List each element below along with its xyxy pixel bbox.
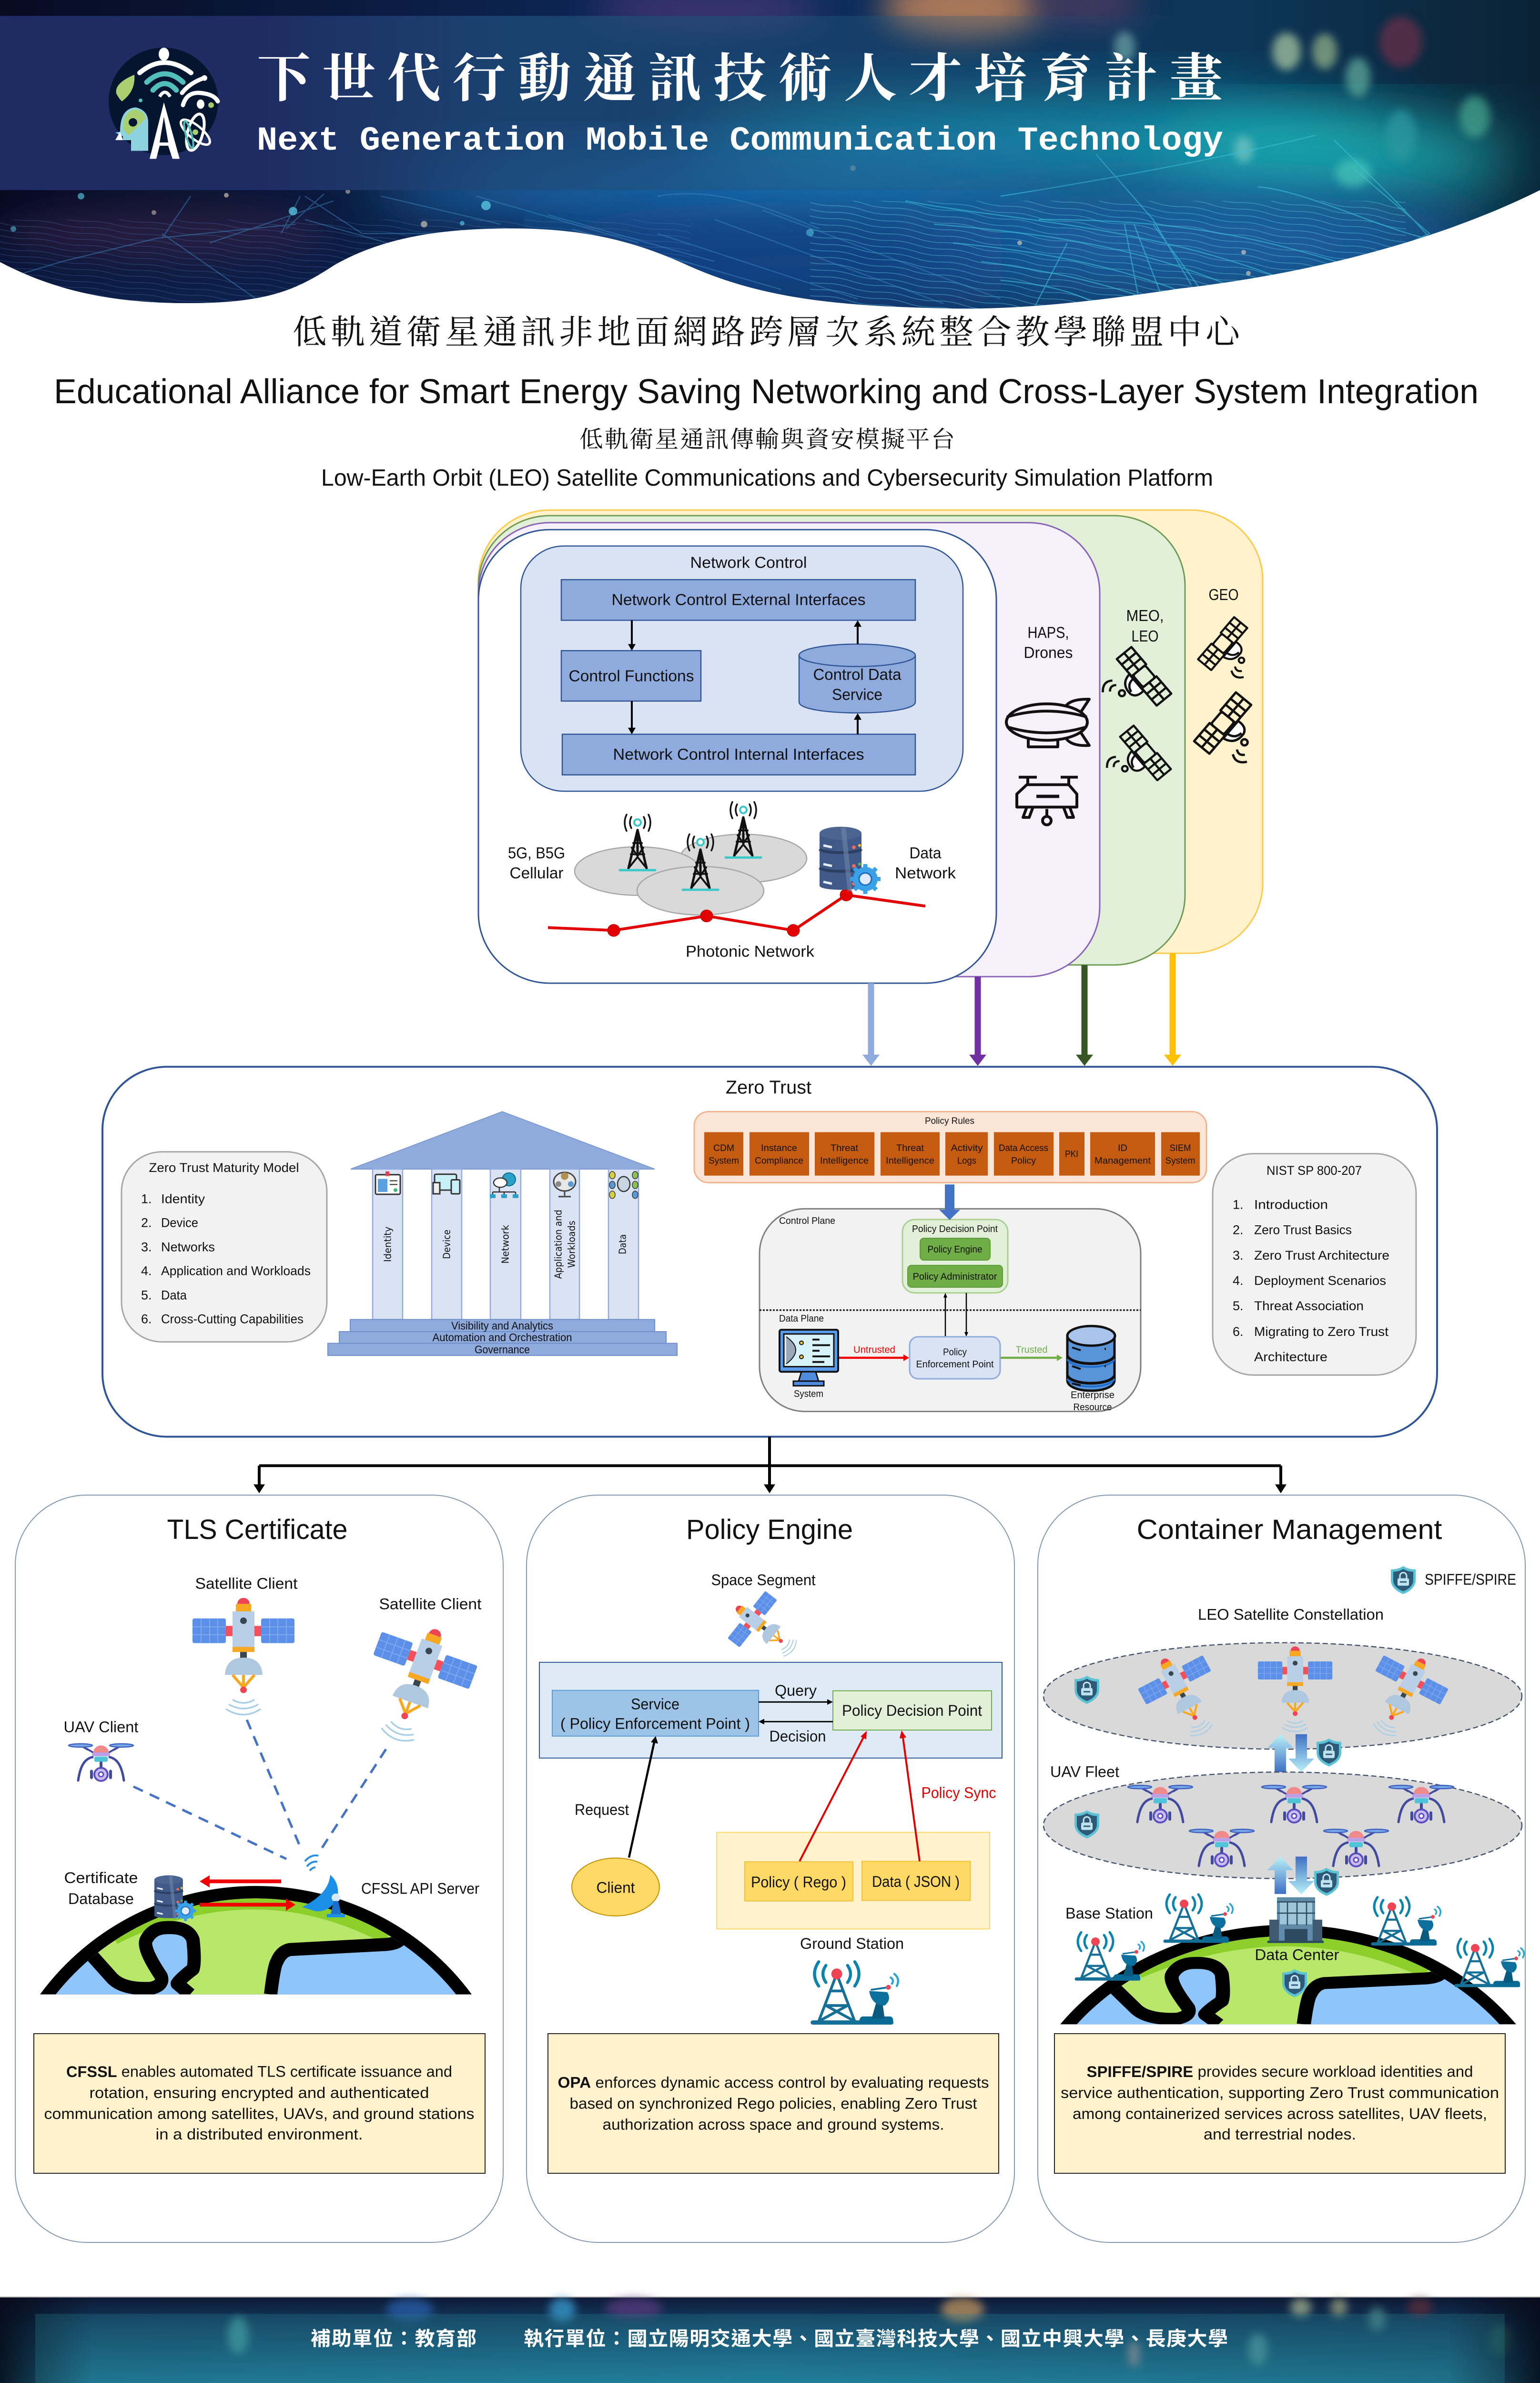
card: nist sp 800-207: Threat Association (1254, 1299, 1364, 1313)
service box: ( Policy Enforcement Point ) (560, 1715, 750, 1732)
box: data json (862, 1861, 970, 1901)
label: satellite client 1: Satellite Client (195, 1575, 297, 1592)
description box: communication among satellites, UAVs, and ground stations (44, 2105, 474, 2122)
label: cellular (508, 845, 565, 882)
space segment region (539, 1662, 1002, 1758)
label: satellite client 2: Satellite Client (379, 1595, 481, 1613)
label: data network: Data (909, 845, 942, 862)
icon: data server (820, 827, 881, 894)
subheading: platform Chinese: 低軌衛星通訊傳輸與資安模擬平台 (579, 427, 955, 452)
box: data json: Data ( JSON ) (872, 1873, 960, 1890)
network control panel (521, 546, 963, 791)
policy rules panel: Policy (1011, 1155, 1036, 1166)
column labels: Workloads (566, 1221, 578, 1268)
arrow: trusted: Trusted (1015, 1344, 1047, 1355)
column labels: Network (500, 1225, 511, 1263)
column icons (375, 1171, 638, 1199)
arrows inside network control (628, 620, 861, 734)
policy decision point: Policy Engine (927, 1244, 982, 1255)
dashed wireless links (133, 1720, 386, 1859)
cylinder: control data service: Service (832, 686, 882, 704)
control and data plane panel: Data Plane (779, 1313, 824, 1324)
card: nist sp 800-207: NIST SP 800-207 (1266, 1163, 1362, 1178)
card: nist sp 800-207: 2. (1233, 1223, 1244, 1237)
column labels: Application and (553, 1210, 564, 1279)
policy rules panel (694, 1111, 1206, 1182)
legend: spiffe spire: SPIFFE/SPIRE (1425, 1570, 1516, 1588)
label: certificate database: Database (68, 1890, 134, 1907)
box: policy rego: Policy ( Rego ) (751, 1873, 846, 1891)
foundation steps: Governance (475, 1344, 530, 1356)
card: nist sp 800-207: Introduction (1254, 1198, 1328, 1212)
policy rules panel: Instance (761, 1143, 797, 1153)
orbit ellipse: leo satellites (1044, 1642, 1522, 1750)
card: nist sp 800-207: 1. (1233, 1198, 1244, 1212)
label: data network (895, 845, 956, 882)
arrows: leo to uav (1267, 1734, 1341, 1772)
card: zero trust maturity model: Application and Workloads (161, 1264, 311, 1278)
label: base station: Base Station (1065, 1904, 1153, 1922)
policy enforcement point: Enforcement Point (916, 1359, 994, 1370)
layer panel: MEO, LEO: LEO (1131, 628, 1159, 645)
cylinder: control data service (799, 644, 915, 713)
panel: policy engine (527, 1495, 1014, 2242)
card: zero trust maturity model: Identity (161, 1192, 205, 1206)
arrows: policy sync (800, 1731, 920, 1861)
columns (373, 1169, 638, 1320)
footer band (0, 2297, 1540, 2383)
label: system: System (794, 1388, 823, 1399)
control and data plane panel (760, 1209, 1141, 1413)
title: program name Chinese: 下世代行動通訊技術人才培育計畫 (257, 50, 1223, 108)
card: zero trust maturity model: 6. (141, 1312, 152, 1326)
service box: Service (631, 1695, 679, 1712)
policy rules panel: Compliance (755, 1155, 803, 1166)
roof (351, 1111, 655, 1169)
card: nist sp 800-207: 5. (1233, 1299, 1244, 1313)
arrow: trusted (1001, 1344, 1063, 1361)
label: enterprise resource: Enterprise (1071, 1390, 1114, 1401)
box: external interfaces: Network Control External Interfaces (612, 591, 865, 609)
title: program name English: Next Generation Mobile Communication Technology (257, 122, 1223, 160)
icons: base stations (1076, 1894, 1524, 1986)
arrows: uav to data center (1267, 1857, 1339, 1896)
icon: data center building (1267, 1897, 1324, 1943)
arrow: policy rules to decision point (939, 1184, 960, 1220)
policy decision point: Policy Administrator (913, 1271, 997, 1282)
label: space segment: Space Segment (711, 1571, 816, 1589)
description box: service authentication, supporting Zero Trust communication (1061, 2084, 1499, 2101)
description box: authorization across space and ground systems. (603, 2116, 944, 2133)
policy rules panel: Intelligence (886, 1155, 934, 1166)
icon: system monitor (780, 1330, 838, 1386)
arrow: untrusted: Untrusted (853, 1344, 895, 1355)
policy enforcement point: Policy (943, 1347, 967, 1358)
column labels: Device (441, 1230, 453, 1259)
description box: SPIFFE/SPIRE provides secure workload identities and (1086, 2063, 1473, 2080)
layer panel: HAPS, Drones: Drones (1023, 644, 1073, 662)
card: zero trust maturity model: 5. (141, 1288, 152, 1302)
layer panel: GEO: GEO (1208, 586, 1239, 604)
label: ground station: Ground Station (800, 1935, 904, 1952)
connector arrows to three bottom panels (253, 1437, 1287, 1493)
layer panel: terrestrial network (478, 530, 996, 983)
icon: satellite 2 (348, 1612, 485, 1756)
card: nist sp 800-207: 3. (1233, 1248, 1244, 1263)
service box (552, 1691, 759, 1736)
description box: based on synchronized Rego policies, enabling Zero Trust (570, 2095, 977, 2112)
label: policy sync: Policy Sync (921, 1784, 996, 1802)
control and data plane panel: Control Plane (779, 1215, 835, 1226)
foundation steps: Visibility and Analytics (451, 1320, 553, 1333)
icon: blimp (1006, 699, 1089, 747)
card: nist sp 800-207: 6. (1233, 1324, 1244, 1339)
label: cellular: Cellular (510, 865, 564, 882)
box: control functions (561, 651, 701, 701)
card: zero trust maturity model: 4. (141, 1264, 152, 1278)
description box (1054, 2034, 1505, 2173)
card: nist sp 800-207: Migrating to Zero Trust (1254, 1324, 1389, 1339)
diagram: zero trust pillars (328, 1111, 677, 1356)
policy decision point box: Policy Decision Point (842, 1701, 982, 1719)
legend: spiffe spire (1391, 1566, 1516, 1594)
photonic network line (548, 889, 925, 937)
policy rules panel: Data Access (999, 1143, 1048, 1153)
card: zero trust maturity model: Networks (161, 1240, 215, 1254)
heading: zero trust: Zero Trust (726, 1077, 811, 1098)
arrow: decision: Decision (770, 1727, 826, 1745)
label: cellular: 5G, B5G (508, 845, 565, 862)
card: zero trust maturity model: Zero Trust Maturity Model (149, 1161, 299, 1175)
arrow: decision (759, 1719, 833, 1745)
footer text: executing universities: 執行單位：國立陽明交通大學、國立臺灣科技大學、國立中興大學、長庚大學 (524, 2328, 1228, 2350)
column labels: Identity (382, 1226, 394, 1262)
description box (548, 2034, 999, 2173)
icon: drone (1017, 777, 1078, 825)
box: policy rego (745, 1862, 853, 1901)
panel: zero trust (102, 1067, 1437, 1437)
icon: satellite (718, 1583, 811, 1674)
logo (109, 48, 218, 159)
orbit ellipse: uav fleet (1044, 1772, 1522, 1879)
box: internal interfaces: Network Control Internal Interfaces (613, 746, 864, 764)
ellipse: client: Client (596, 1879, 635, 1896)
policy rules panel: System (1165, 1155, 1196, 1166)
box: control functions: Control Functions (569, 668, 694, 685)
column labels (382, 1210, 628, 1279)
description box: CFSSL enables automated TLS certificate issuance and (66, 2063, 452, 2080)
layer panel: HAPS, Drones (478, 523, 1100, 977)
icon: certificate database server (154, 1875, 196, 1921)
card: zero trust maturity model: Device (161, 1216, 198, 1230)
card: nist sp 800-207: Zero Trust Basics (1254, 1223, 1352, 1237)
policy rules panel: Logs (957, 1155, 976, 1166)
label: enterprise resource: Resource (1073, 1402, 1112, 1413)
header banner background (0, 0, 1540, 322)
ellipse: client (572, 1858, 659, 1916)
box: external interfaces (561, 580, 915, 620)
arrows: certificate exchange (200, 1875, 295, 1911)
layer panel: MEO, LEO (478, 516, 1185, 965)
policy rules panel: ID (1118, 1143, 1127, 1153)
label: certificate database: Certificate (64, 1869, 138, 1886)
policy rules panel: Policy Rules (925, 1116, 974, 1126)
arrow: query: Query (775, 1681, 817, 1699)
foundation steps (328, 1320, 677, 1356)
icon: satellite 1 (192, 1598, 294, 1715)
policy decision point: Policy Decision Point (912, 1223, 998, 1234)
card: zero trust maturity model: 1. (141, 1192, 152, 1206)
card: zero trust maturity model: 2. (141, 1216, 152, 1230)
arrow: query (759, 1681, 833, 1705)
layered network architecture diagram (478, 510, 1277, 983)
heading: alliance name Chinese: 低軌道衛星通訊非地面網路跨層次系統整合教學聯盟中心 (293, 314, 1241, 351)
description box: rotation, ensuring encrypted and authenticated (90, 2084, 429, 2101)
policy rules panel: Activity (951, 1143, 983, 1153)
footer text: sponsor: 補助單位：教育部 (311, 2328, 476, 2350)
arrows between pdp and pep (943, 1293, 968, 1337)
layer panel: MEO, LEO: MEO, (1126, 607, 1164, 625)
heading: policy engine: Policy Engine (686, 1513, 853, 1545)
card: zero trust maturity model: 3. (141, 1240, 152, 1254)
policy rules panel: System (709, 1155, 739, 1166)
card: nist sp 800-207: 4. (1233, 1273, 1244, 1288)
card: zero trust maturity model (122, 1152, 327, 1342)
card: zero trust maturity model: Data (161, 1288, 187, 1302)
policy rules panel: SIEM (1169, 1143, 1191, 1153)
cellular coverage cells (575, 834, 807, 915)
label: data center: Data Center (1255, 1946, 1339, 1964)
policy rules panel: Threat (831, 1143, 859, 1153)
panel: container management (1038, 1495, 1525, 2242)
card: nist sp 800-207: Architecture (1254, 1350, 1327, 1364)
panel: tls certificate (15, 1495, 503, 2242)
card: nist sp 800-207: Deployment Scenarios (1254, 1273, 1386, 1288)
policy rules panel: CDM (713, 1143, 734, 1153)
column labels: Data (617, 1234, 628, 1254)
icon: ground station (813, 1962, 898, 2023)
icon: uav (69, 1744, 133, 1781)
policy decision point box (833, 1691, 992, 1730)
icons: cell towers (620, 802, 761, 890)
card: nist sp 800-207 (1213, 1154, 1416, 1375)
label: uav fleet: UAV Fleet (1050, 1763, 1119, 1780)
icon: api server dish (302, 1855, 345, 1917)
description box: in a distributed environment. (155, 2125, 363, 2143)
policy rules panel: Intelligence (820, 1155, 869, 1166)
label: enterprise resource (1071, 1390, 1114, 1413)
card: zero trust maturity model: Cross-Cutting Capabilities (161, 1312, 304, 1326)
ground station region (717, 1833, 990, 1929)
card: nist sp 800-207: Zero Trust Architecture (1254, 1248, 1389, 1263)
icon: shield on earth (1282, 1969, 1307, 1997)
layer panel: GEO (478, 510, 1277, 953)
arrows from layers to zero trust (862, 953, 1181, 1066)
policy rules panel: Management (1094, 1155, 1151, 1166)
policy rules panel: PKI (1065, 1149, 1078, 1159)
label: certificate database (64, 1869, 138, 1907)
heading: container management: Container Management (1137, 1513, 1442, 1545)
subheading: platform English: Low-Earth Orbit (LEO) Satellite Communications and Cybersecurity Simulation Platform (321, 465, 1213, 491)
heading: alliance name English: Educational Alliance for Smart Energy Saving Networking and Cross-Layer System Integration (54, 372, 1479, 411)
arrow: request (629, 1736, 658, 1857)
description box: OPA enforces dynamic access control by evaluating requests (557, 2074, 989, 2091)
policy decision point (902, 1220, 1008, 1293)
label: data network: Network (895, 865, 956, 882)
policy rules panel: Threat (896, 1143, 924, 1153)
policy enforcement point (910, 1337, 1000, 1379)
network control panel: Network Control (690, 554, 807, 571)
arrow: untrusted (839, 1344, 909, 1361)
illustration: earth (40, 1886, 472, 1995)
illustration: earth (1060, 1925, 1516, 2024)
label: request: Request (575, 1801, 629, 1818)
cylinder: control data service: Control Data (813, 666, 902, 683)
label: uav client: UAV Client (63, 1718, 138, 1735)
icon: enterprise resource database (1067, 1326, 1115, 1391)
foundation steps: Automation and Orchestration (433, 1331, 572, 1344)
box: internal interfaces (562, 734, 915, 775)
layer panel: HAPS, Drones: HAPS, (1027, 624, 1069, 642)
description box (34, 2034, 485, 2173)
label: leo constellation: LEO Satellite Constellation (1198, 1606, 1384, 1623)
description box: among containerized services across satellites, UAV fleets, (1073, 2105, 1487, 2122)
label: photonic network: Photonic Network (686, 943, 814, 961)
label: cfssl api server: CFSSL API Server (361, 1880, 479, 1897)
description box: and terrestrial nodes. (1204, 2125, 1356, 2143)
heading: tls certificate: TLS Certificate (167, 1513, 347, 1545)
